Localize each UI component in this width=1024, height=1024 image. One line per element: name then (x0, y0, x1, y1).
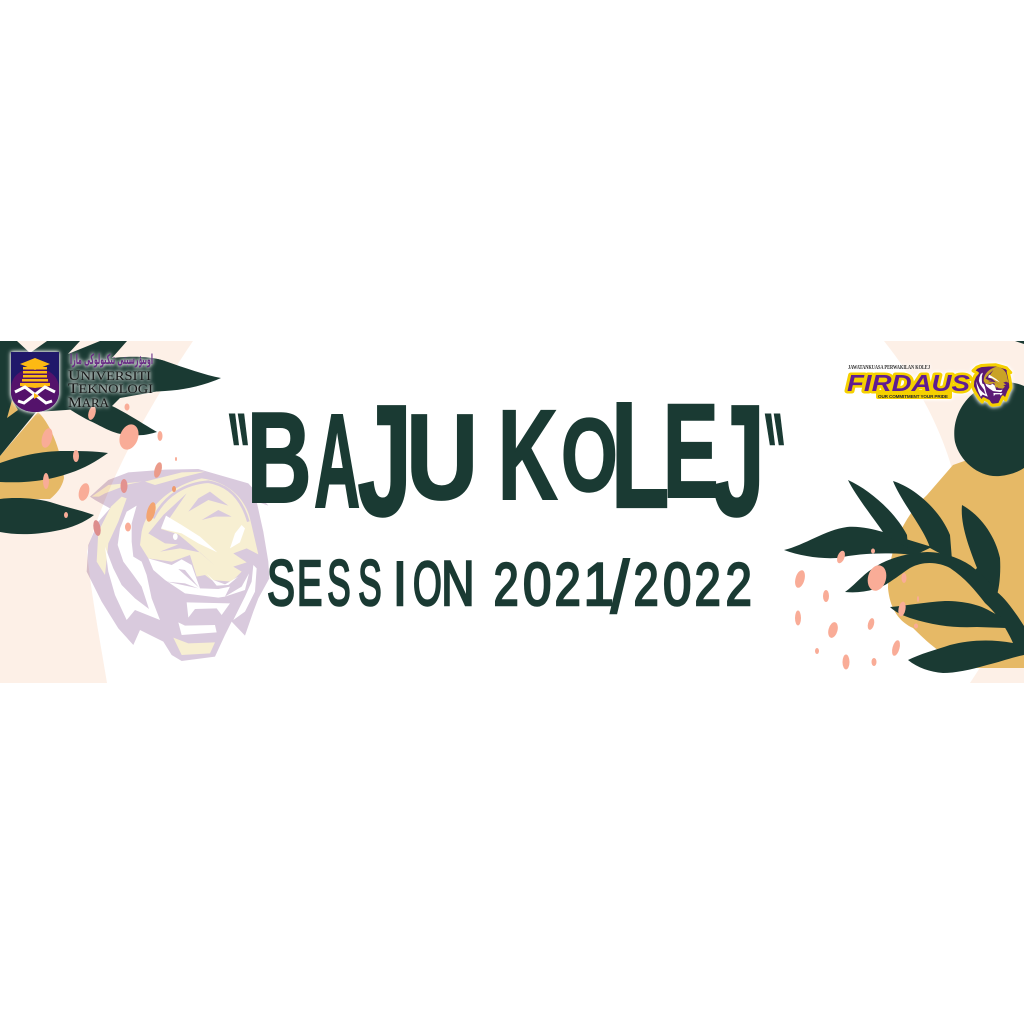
shape: right dark circle (954, 341, 1024, 476)
leaf (85, 358, 221, 392)
subtitle: S (267, 548, 295, 619)
title: " (759, 390, 798, 523)
subtitle: E (297, 548, 322, 620)
subtitle: 2 (695, 552, 721, 618)
title: K (498, 383, 558, 526)
subtitle: 1 (584, 551, 614, 619)
committee name: JAWATANKUASA PERWAKILAN KOLEJ (848, 364, 931, 371)
leaf (962, 505, 1000, 598)
shape: small gold triangle (7, 400, 18, 418)
subtitle: 0 (523, 551, 551, 618)
shape: left gold (0, 412, 64, 499)
subtitle: N (441, 548, 475, 619)
subtitle: / (611, 548, 629, 628)
leaf mass behind logo (0, 341, 165, 456)
tagline: OUR COMMITMENT YOUR PRIDE (878, 394, 948, 399)
title: U (406, 389, 478, 525)
logo: UiTM (11, 352, 153, 412)
shape: right gold blob (888, 440, 1024, 668)
subtitle: 2 (634, 552, 659, 619)
title: " (223, 390, 262, 523)
logo text: UNIVERSITI (68, 368, 151, 384)
subtitle: 2 (555, 552, 581, 618)
spots: right (793, 548, 919, 670)
logo: Firdaus (847, 364, 1011, 405)
subtitle: S (358, 547, 382, 619)
subtitle: S (327, 547, 351, 619)
subtitle (267, 547, 752, 628)
subtitle: I (393, 549, 407, 618)
leaf (784, 527, 932, 558)
title: J (358, 372, 412, 549)
subtitle: 2 (494, 552, 519, 619)
leaf (908, 640, 1024, 673)
title: O (561, 398, 618, 514)
logo text (68, 368, 153, 411)
tiger watermark (87, 469, 269, 661)
title: E (663, 376, 719, 526)
title (223, 370, 798, 549)
logo text: MARA (68, 395, 109, 411)
logo text: TEKNOLOGI (68, 381, 153, 397)
subtitle: 0 (663, 551, 691, 618)
leaf (0, 498, 94, 534)
leaf (60, 400, 157, 435)
panel: right cream shape (884, 341, 1024, 683)
text: اونيۏرسيتي تيكنولوڬي مارا (70, 352, 153, 368)
subtitle: 2 (726, 552, 752, 618)
tagline strip (876, 390, 952, 399)
panel: left cream shape (0, 341, 193, 683)
icon: tiger head (972, 365, 1011, 405)
spots: left (40, 404, 177, 536)
plant: right leaves (784, 480, 1024, 673)
leaf and main branch (845, 552, 1024, 652)
title: B (247, 385, 312, 530)
title: J (713, 372, 765, 549)
leaf (0, 451, 108, 482)
leaf (893, 481, 952, 560)
plant: left leaves (0, 341, 221, 534)
title: A (314, 387, 360, 536)
subtitle: O (413, 549, 442, 618)
title: L (611, 370, 669, 539)
icon: UiTM shield (11, 352, 59, 412)
leaf (890, 601, 1006, 628)
wordmark: FIRDAUS (847, 370, 971, 396)
leaf (848, 480, 908, 548)
